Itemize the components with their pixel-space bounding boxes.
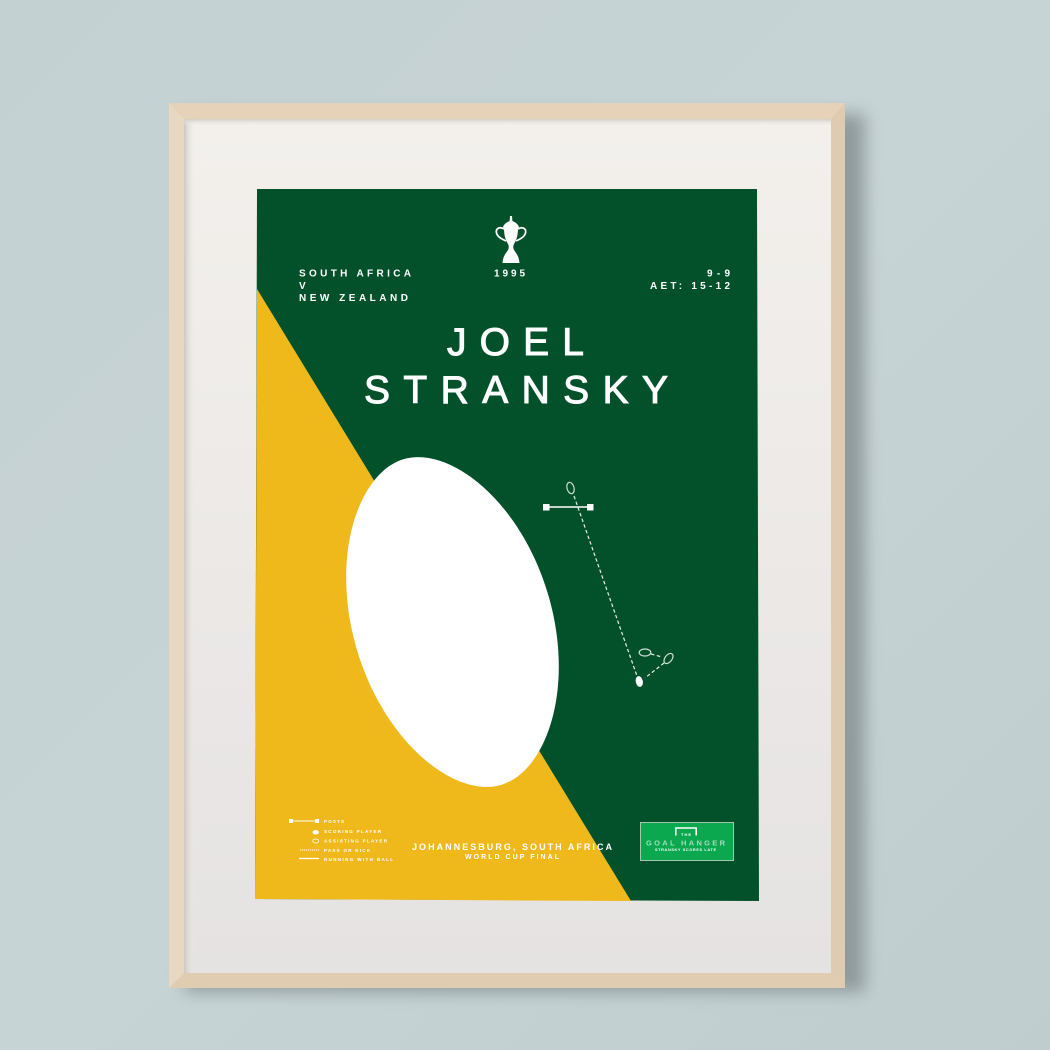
text: teams: SOUTH AFRICA [299, 268, 411, 280]
panel: green background [255, 189, 759, 901]
poster [255, 189, 759, 901]
text: score: 9-9 [707, 268, 730, 280]
text: venue: JOHANNESBURG, SOUTH AFRICA [412, 842, 612, 852]
legend [289, 819, 393, 862]
icon: assisting player one [639, 649, 651, 656]
logo: the goal hanger: THE [681, 832, 691, 837]
text: score [650, 268, 730, 292]
title: STRANSKY [364, 369, 668, 412]
text: teams: V [299, 281, 306, 292]
icon: trophy [496, 216, 526, 263]
icon: assisting player two [662, 652, 675, 665]
icon: goal [676, 828, 696, 836]
legend: running with ball: RUNNING WITH BALL [324, 857, 393, 862]
text: score: AET: 15-12 [650, 281, 730, 292]
title [364, 321, 668, 412]
logo: the goal hanger [640, 822, 734, 860]
legend: posts: POSTS [324, 819, 344, 824]
text: competition: WORLD CUP FINAL [465, 854, 560, 861]
legend: scoring player: SCORING PLAYER [324, 829, 382, 834]
logo: the goal hanger: GOAL HANGER [646, 838, 726, 848]
frame shadow [185, 114, 865, 992]
logo: the goal hanger: STRANSKY SCORES LATE [655, 848, 716, 852]
text: teams [299, 268, 411, 304]
pass paths [645, 654, 664, 678]
legend: assisting player: ASSISTING PLAYER [324, 838, 388, 844]
icon: posts [543, 504, 594, 510]
text: year: 1995 [494, 268, 525, 280]
icon: scoring player [635, 675, 644, 688]
title: JOEL [447, 321, 584, 364]
icon: kicker position [566, 481, 575, 495]
kick path [574, 496, 637, 676]
legend: pass or kick: PASS OR KICK [324, 848, 371, 853]
mat board [184, 119, 831, 973]
text: teams: NEW ZEALAND [299, 293, 408, 304]
wooden frame [169, 103, 845, 988]
panel: yellow diagonal [255, 289, 631, 901]
chart: try and conversion diagram [543, 481, 675, 688]
icon: rugby ball [308, 431, 597, 813]
